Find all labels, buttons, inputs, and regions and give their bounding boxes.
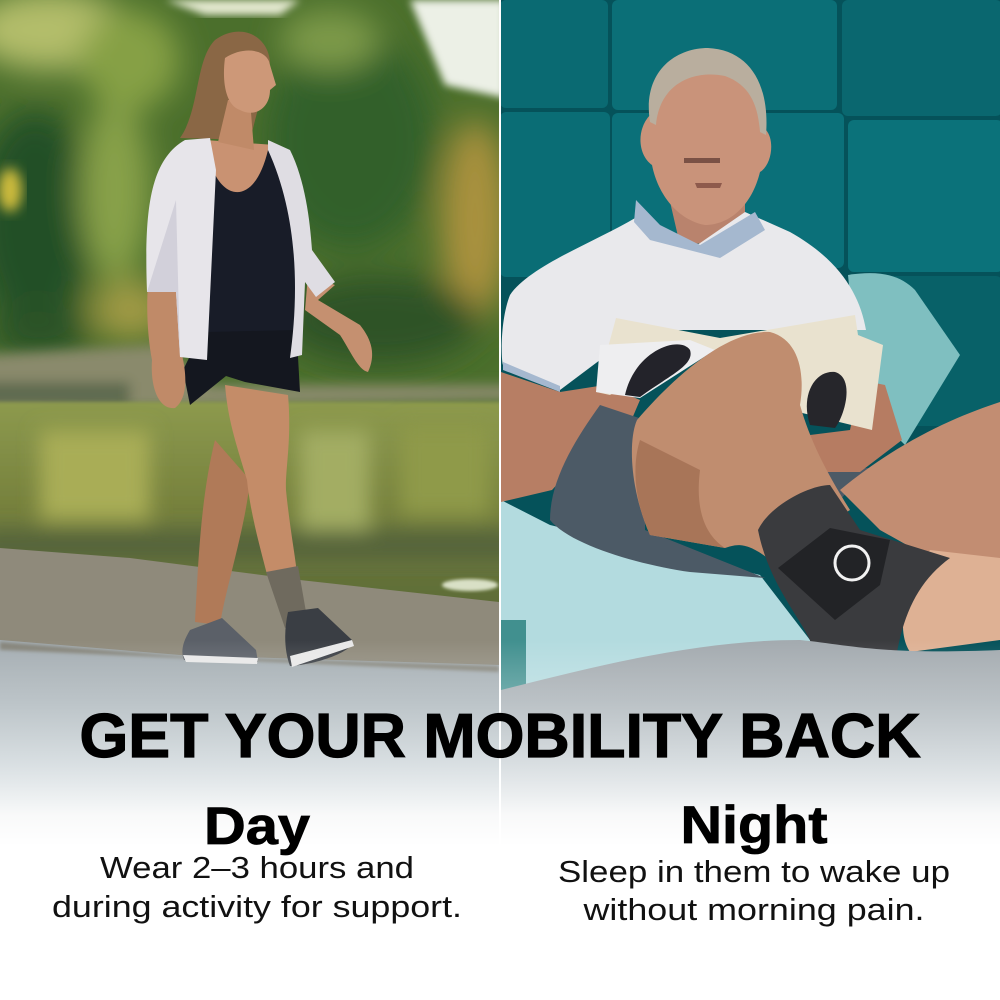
teal padded headboard [500, 0, 1000, 700]
gravel path [0, 548, 499, 812]
ankle brace [758, 485, 950, 653]
eyes and mouth [684, 158, 720, 163]
head [640, 58, 771, 225]
forest background [0, 0, 510, 410]
right forearm and hand [810, 380, 902, 472]
centre divider [499, 0, 501, 830]
back leg [195, 440, 250, 625]
white hoodie left [146, 138, 216, 360]
neck [218, 100, 254, 150]
patterned shorts [550, 405, 765, 578]
neck [670, 204, 745, 244]
shorts far side [828, 468, 868, 498]
panel: day photo, woman walking by a lake [0, 0, 525, 850]
torso skin [210, 140, 268, 192]
sleeve stripe [503, 362, 560, 392]
white fade overlay [0, 640, 1000, 846]
front leg [225, 385, 297, 578]
teal blanket behind man [848, 273, 960, 445]
body: Day line 2: during activity for support. [52, 889, 462, 924]
sock [266, 566, 306, 628]
arm right [305, 275, 372, 372]
white polo [502, 212, 866, 390]
thigh shadow [635, 440, 725, 548]
body: Day line 1: Wear 2–3 hours and [100, 850, 414, 885]
raised knee and shin [632, 332, 850, 560]
shorts [183, 320, 300, 405]
white hoodie right [268, 140, 335, 358]
heading: Night: Night [680, 796, 828, 855]
panel: night photo, man reading in bed [500, 0, 1000, 850]
arm left [147, 285, 185, 408]
collar [634, 200, 765, 258]
text block: night [558, 796, 950, 927]
shoe left [182, 618, 258, 662]
title: GET YOUR MOBILITY BACK [80, 702, 921, 771]
left arm and hand [501, 372, 640, 502]
book [596, 315, 883, 430]
face [224, 51, 276, 113]
far shore [0, 345, 525, 412]
lake water [0, 402, 520, 612]
hair [649, 48, 767, 135]
woman walking [146, 32, 372, 667]
grey blanket [501, 640, 1000, 850]
hair [180, 32, 270, 140]
text block: day [52, 797, 462, 924]
foot [903, 550, 1000, 652]
navy tank top [208, 150, 297, 332]
body: Night line 2: without morning pain. [582, 892, 924, 927]
heading: Day: Day [204, 797, 311, 856]
body: Night line 1: Sleep in them to wake up [558, 854, 950, 889]
sky gaps [165, 0, 300, 15]
man reading [501, 48, 1000, 653]
pale bedding [501, 500, 815, 700]
shoe right [285, 608, 352, 666]
other thigh [840, 402, 1000, 560]
